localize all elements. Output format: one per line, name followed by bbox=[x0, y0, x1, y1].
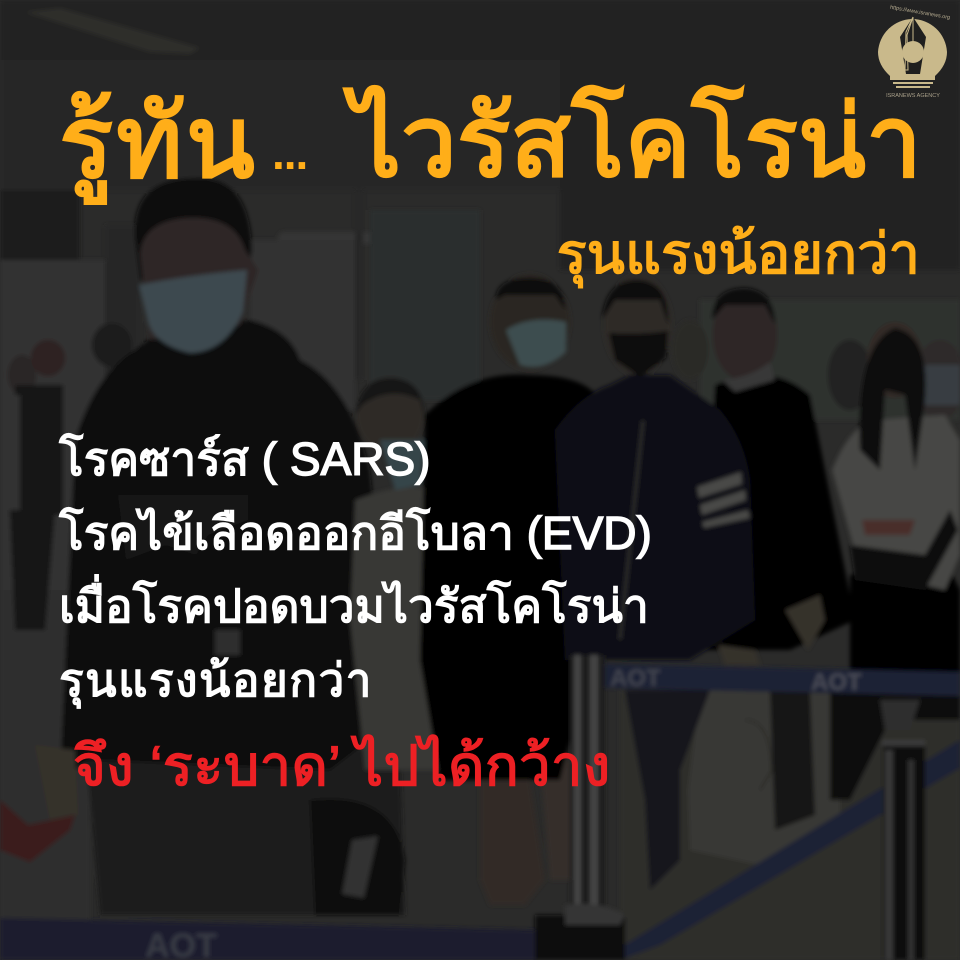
right woman bbox=[850, 560, 960, 720]
man 4 black jacket bbox=[700, 375, 855, 650]
floor / backdrop lower bbox=[0, 590, 90, 920]
body text: รุนแรงน้อยกว่า bbox=[59, 654, 373, 706]
man left: trousers, hoodie, hair, face, mask bbox=[85, 740, 405, 915]
title: รู้ทัน bbox=[59, 87, 258, 199]
jeans bbox=[625, 690, 710, 890]
red callout: จึง ‘ระบาด’ ไปได้กว้าง bbox=[73, 734, 611, 797]
body text bbox=[58, 432, 652, 709]
hands bbox=[718, 645, 760, 665]
bag bbox=[688, 690, 840, 865]
logo: Isranews Agency: ISRANEWS AGENCY bbox=[886, 93, 940, 99]
title: ... bbox=[272, 127, 307, 179]
body text: เมื่อโรคปอดบวมไวรัสโคโรน่า bbox=[59, 580, 649, 632]
woman with glasses bbox=[350, 487, 510, 770]
subtitle: รุนแรงน้อยกว่า bbox=[557, 222, 920, 285]
rope band diagonal bbox=[600, 740, 960, 960]
right trousers bbox=[830, 690, 960, 800]
man 2 bbox=[420, 374, 600, 780]
title bbox=[59, 84, 922, 205]
stanchions bbox=[570, 655, 605, 915]
body text: โรคไข้เลือดออกอีโบลา (EVD) bbox=[59, 506, 652, 558]
body text: โรคซาร์ส ( SARS) bbox=[59, 433, 430, 485]
logo: Isranews Agency bbox=[878, 4, 950, 99]
title: ไวรัสโคโรน่า bbox=[351, 87, 922, 198]
rope band bottom bbox=[0, 918, 540, 960]
background heads between bbox=[672, 320, 708, 380]
background people far left bbox=[8, 355, 36, 395]
hand and red sleeve lower left bbox=[35, 745, 78, 820]
man 3 hoodie with stripes bbox=[555, 375, 755, 660]
woman legs bbox=[480, 780, 545, 905]
rope band horizontal bbox=[605, 664, 960, 696]
background photo: masked travellers in an airport: AOT bbox=[610, 665, 661, 692]
background photo: masked travellers in an airport: AOT bbox=[811, 669, 862, 696]
ceiling bbox=[0, 0, 960, 60]
logo: Isranews Agency: https://www.isranews.org bbox=[890, 5, 950, 21]
